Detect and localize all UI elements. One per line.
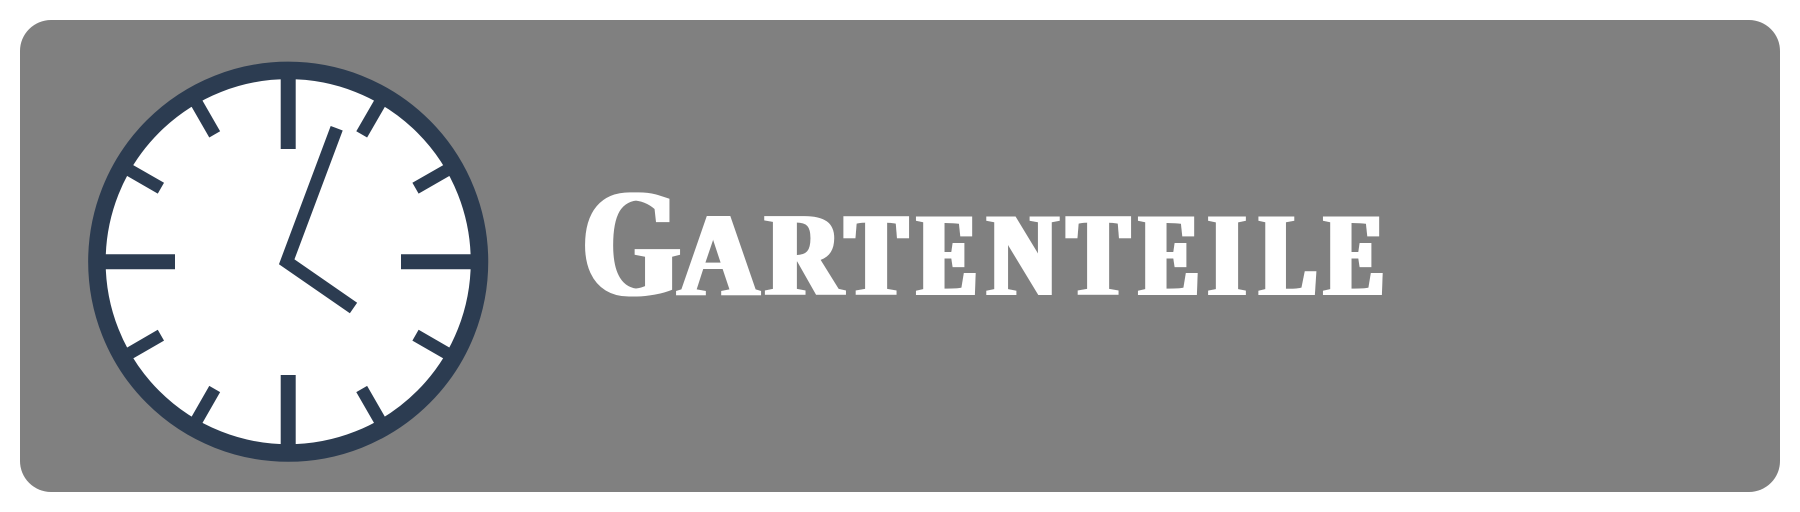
clock face [97, 70, 479, 453]
title: T [846, 188, 906, 321]
title: N [988, 190, 1057, 322]
title [583, 158, 1383, 329]
hour ticks [104, 78, 472, 446]
title: I [1209, 190, 1245, 322]
title: E [1140, 188, 1198, 321]
title: R [766, 189, 842, 322]
title: L [1261, 189, 1316, 322]
clock hands [287, 128, 354, 308]
title: G [583, 158, 679, 329]
title: E [918, 188, 976, 321]
title: A [679, 188, 758, 321]
icon: clock [97, 70, 479, 453]
title: E [1326, 188, 1383, 321]
title: T [1068, 188, 1128, 321]
